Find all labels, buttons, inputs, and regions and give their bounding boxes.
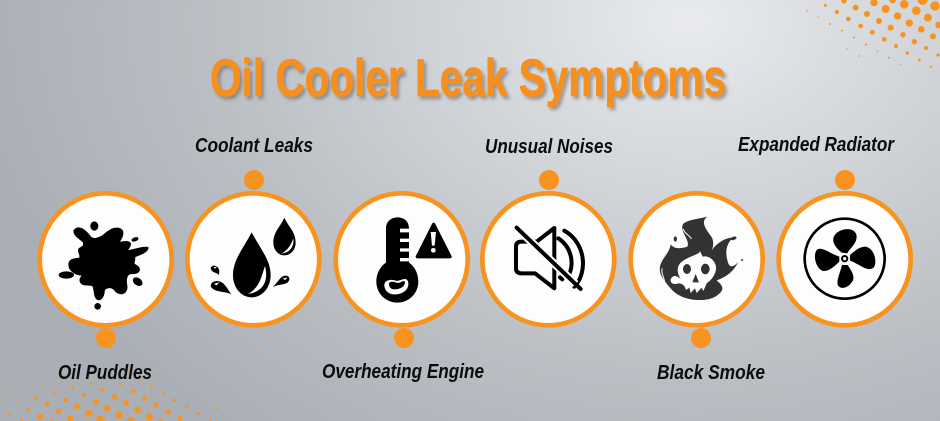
- item: Black Smoke: [631, 193, 765, 384]
- circle badge: [187, 193, 319, 325]
- circle badge: [40, 193, 172, 325]
- connector dot: [835, 170, 855, 190]
- icon: thermometer with warning: [376, 217, 450, 303]
- item: Unusual Noises: [482, 136, 614, 325]
- label: Expanded Radiator: [738, 134, 895, 156]
- connector dot: [244, 170, 264, 190]
- icon: oil splat: [59, 221, 148, 310]
- icon: fan: [805, 219, 885, 299]
- label: Oil Puddles: [58, 362, 152, 384]
- connector dot: [539, 170, 559, 190]
- connector dot: [394, 328, 414, 348]
- title: Oil Cooler Leak Symptoms: [210, 49, 726, 108]
- decorative dots: bottom left: [4, 372, 218, 421]
- circle badge: [631, 193, 763, 325]
- icon: muted speaker: [516, 228, 583, 289]
- icon: flaming skull: [660, 217, 743, 300]
- connector dot: [96, 328, 116, 348]
- connector dot: [691, 328, 711, 348]
- item: Oil Puddles: [40, 193, 172, 384]
- label: Unusual Noises: [485, 136, 613, 158]
- circle badge: [779, 193, 911, 325]
- item: Coolant Leaks: [187, 135, 319, 325]
- circle badge: [482, 193, 614, 325]
- label: Overheating Engine: [322, 361, 484, 383]
- icon: water drops: [211, 218, 296, 297]
- label: Coolant Leaks: [195, 135, 313, 157]
- label: Black Smoke: [657, 362, 765, 384]
- item: Overheating Engine: [322, 193, 484, 383]
- decorative dots: top right: [806, 0, 940, 68]
- circle badge: [336, 193, 468, 325]
- item: Expanded Radiator: [738, 134, 911, 325]
